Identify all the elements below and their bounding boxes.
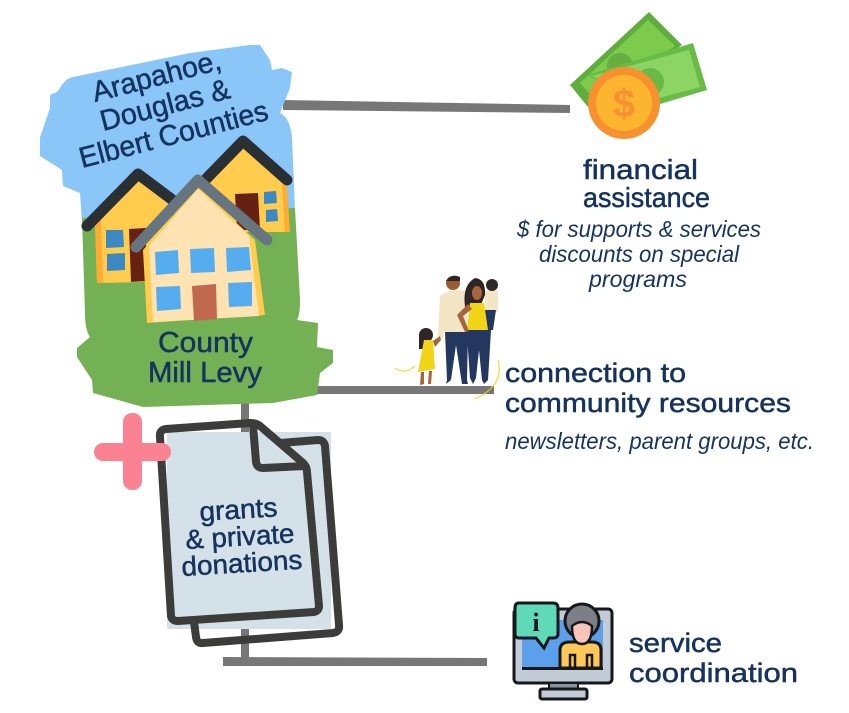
text: connection to community resources: connection to	[505, 358, 686, 388]
connector: bottom line	[223, 657, 487, 666]
heading: counties: Elbert Counties	[76, 95, 272, 175]
grass brush	[77, 208, 333, 407]
sky brush	[40, 45, 295, 222]
icon: money: $	[613, 82, 635, 126]
text: financial assistance detail: $ for supports & services	[516, 216, 761, 242]
text: financial assistance detail	[516, 216, 761, 292]
panel: grants document	[160, 423, 339, 643]
connector: middle line	[310, 386, 494, 394]
icon: plus sign	[94, 413, 171, 490]
house: right	[200, 141, 290, 232]
house: left	[87, 174, 175, 283]
girl	[419, 328, 433, 342]
text: community resources detail: newsletters, parent groups, etc.	[505, 428, 814, 454]
document label: & private	[185, 518, 295, 555]
document label	[181, 492, 303, 582]
man	[445, 332, 468, 384]
text: financial assistance: financial	[583, 154, 698, 185]
woman	[466, 330, 491, 384]
heading: county mill levy: County	[158, 327, 254, 359]
text: financial assistance detail: discounts on special	[539, 241, 740, 267]
text: service coordination	[629, 628, 798, 688]
text: service coordination: service	[629, 628, 722, 658]
text: financial assistance	[583, 154, 710, 213]
heading: county mill levy: Mill Levy	[148, 357, 262, 389]
heading: counties: Douglas &	[97, 73, 234, 138]
page fold	[253, 425, 305, 468]
icon: service coordination monitor	[514, 603, 612, 699]
heading: county mill levy	[148, 327, 262, 389]
child held by woman	[485, 290, 498, 312]
document label: donations	[181, 545, 303, 582]
heading: counties: Arapahoe,	[89, 45, 225, 109]
text: connection to community resources	[505, 358, 791, 418]
text: service coordination: coordination	[629, 658, 798, 688]
person	[560, 642, 601, 668]
text: financial assistance: assistance	[583, 182, 710, 213]
icon: family	[395, 276, 499, 399]
info bubble	[515, 603, 558, 648]
heading: counties	[76, 45, 272, 175]
connector: top line	[283, 100, 570, 113]
icon: money	[570, 12, 707, 139]
panel: county illustration	[40, 45, 333, 407]
motion lines	[395, 360, 499, 399]
front page outline	[160, 423, 319, 621]
monitor	[514, 609, 612, 683]
text: connection to community resources: community resources	[505, 388, 791, 418]
document background	[167, 432, 331, 629]
icon: service coordination monitor: i	[532, 608, 540, 637]
house: front	[136, 180, 267, 323]
back page outline	[194, 440, 339, 643]
document label: grants	[199, 492, 278, 527]
connector: vertical line	[241, 400, 249, 662]
text: financial assistance detail: programs	[588, 266, 687, 292]
